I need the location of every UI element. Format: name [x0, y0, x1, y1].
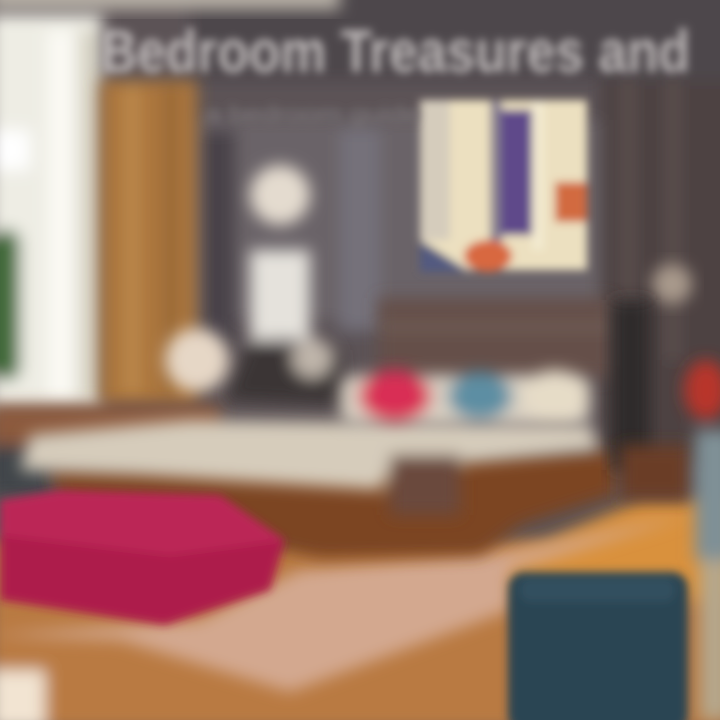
floor	[0, 405, 720, 720]
table lamp	[165, 328, 229, 392]
rug	[0, 515, 690, 692]
nightstand	[620, 445, 690, 500]
mattress and bedding	[20, 420, 600, 515]
wall painting	[420, 100, 587, 272]
wall knob	[652, 264, 692, 304]
brown curtain	[100, 80, 197, 405]
flower vase	[684, 360, 720, 720]
wall mirror and lamp	[225, 165, 345, 405]
bed base	[50, 450, 615, 558]
pink ottoman	[0, 490, 285, 625]
pillows	[340, 370, 590, 425]
subheading: a bedroom guide	[205, 101, 420, 128]
blue stool	[508, 572, 688, 720]
window with white curtains	[0, 14, 102, 410]
ceiling highlight	[0, 0, 340, 10]
headboard	[378, 298, 613, 378]
dark bedpost	[612, 300, 650, 470]
